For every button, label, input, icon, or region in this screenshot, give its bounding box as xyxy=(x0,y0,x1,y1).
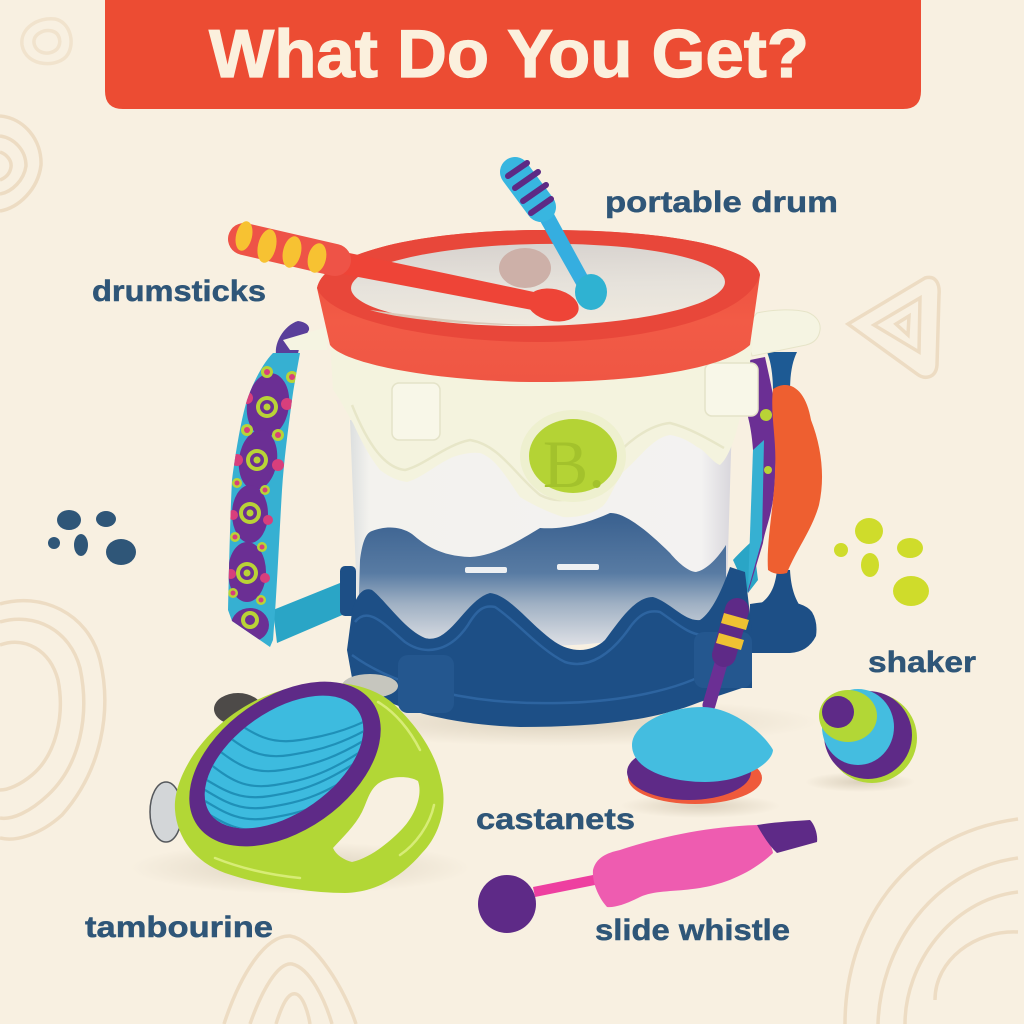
drum navy base xyxy=(347,567,752,727)
jingles xyxy=(150,674,398,842)
icon: tambourine xyxy=(149,674,444,893)
label: shaker: shaker xyxy=(868,646,976,679)
drum rim xyxy=(317,230,760,382)
icon: portable drum xyxy=(283,230,760,727)
drum inner wave xyxy=(358,513,726,646)
icon: blue drumstick xyxy=(508,163,607,310)
drum clear body xyxy=(350,420,732,646)
drum shadow xyxy=(300,698,820,746)
title: What Do You Get? xyxy=(209,16,809,92)
strap anchor xyxy=(340,566,356,616)
title banner xyxy=(105,0,921,109)
icon: slide whistle xyxy=(478,820,817,933)
icon: right strap xyxy=(733,357,776,593)
icon: drum handle xyxy=(748,310,822,653)
label: castanets: castanets xyxy=(476,803,635,836)
dots: navy xyxy=(48,510,136,565)
logo badge xyxy=(520,410,626,502)
label: portable drum: portable drum xyxy=(605,186,838,219)
castanet handle xyxy=(709,610,749,705)
icon: red drumstick xyxy=(233,220,582,326)
label: drumsticks: drumsticks xyxy=(92,275,266,308)
label: slide whistle: slide whistle xyxy=(595,914,790,947)
icon: castanets xyxy=(620,610,780,818)
label: tambourine: tambourine xyxy=(85,911,273,944)
icon: left strap xyxy=(226,321,347,647)
dots: lime xyxy=(834,518,929,606)
icon: shaker xyxy=(805,689,917,792)
drum cream band xyxy=(330,340,753,517)
drum head xyxy=(350,241,726,329)
logo badge: B. xyxy=(543,426,605,502)
